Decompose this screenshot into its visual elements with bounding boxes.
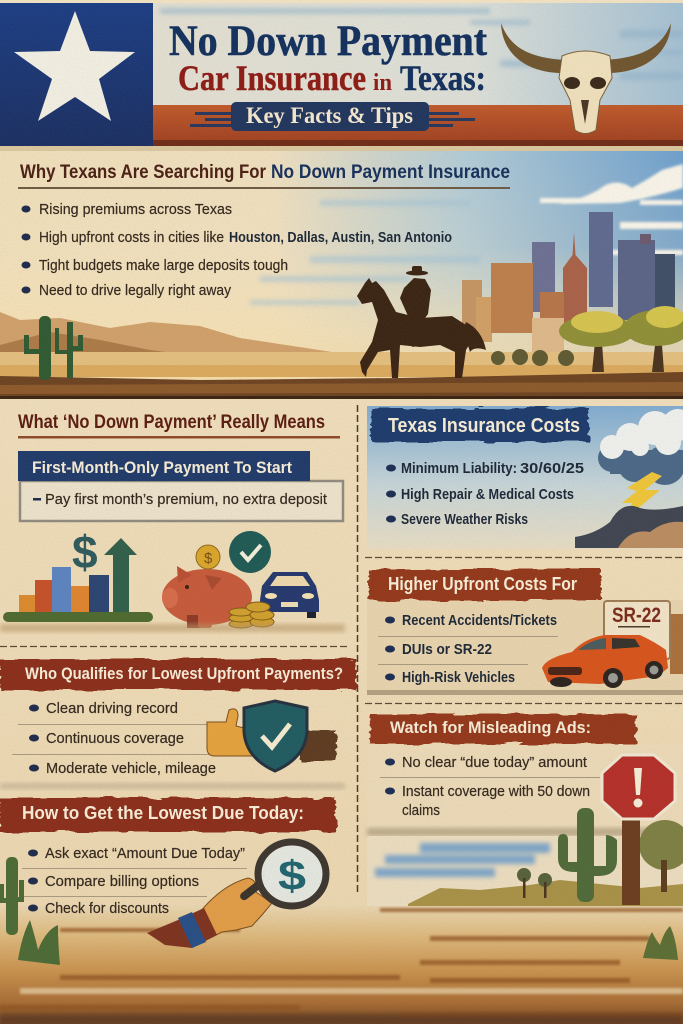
bullet list: Moderate vehicle, mileage bbox=[46, 760, 216, 777]
bullet list: Clean driving record bbox=[46, 700, 178, 717]
heading: Why Texans Are Searching For bbox=[20, 162, 267, 183]
bullet list bbox=[378, 612, 558, 686]
icon: storm cloud with lightning bbox=[575, 409, 683, 548]
panel: why Texans are searching bbox=[0, 146, 683, 399]
banner heading bbox=[368, 569, 601, 600]
icon: cowboy on horse bbox=[357, 266, 486, 378]
title: in bbox=[373, 70, 392, 96]
bullet list: Minimum Liability: bbox=[401, 460, 517, 477]
icon: hand with magnifying glass: $ bbox=[278, 852, 306, 899]
bullet list: Houston, Dallas, Austin, San Antonio bbox=[229, 229, 452, 246]
banner heading: Texas Insurance Costs bbox=[388, 415, 580, 437]
bullet list bbox=[22, 845, 247, 917]
bullet list: claims bbox=[402, 802, 440, 819]
trees bbox=[491, 306, 683, 372]
icon: small cactus and plants bbox=[0, 857, 60, 965]
banner heading bbox=[370, 714, 636, 744]
bullet list bbox=[0, 700, 345, 789]
icon: orange car bbox=[542, 635, 668, 688]
icon: longhorn skull bbox=[501, 23, 671, 134]
bullet list: Tight budgets make large deposits tough bbox=[39, 257, 288, 274]
title: Car Insurance bbox=[178, 58, 366, 98]
heading bbox=[18, 162, 510, 189]
heading: What ‘No Down Payment’ Really Means bbox=[18, 412, 325, 433]
bullet list: Continuous coverage bbox=[46, 730, 184, 747]
clouds bbox=[540, 164, 683, 255]
bullet list: Ask exact “Amount Due Today” bbox=[45, 845, 245, 862]
bullet list: No clear “due today” amount bbox=[402, 754, 588, 771]
callout: first month payment: First-Month-Only Payment To Start bbox=[32, 458, 292, 477]
bullet list: Need to drive legally right away bbox=[39, 282, 231, 299]
icon: tall cactus bbox=[558, 808, 617, 902]
banner heading: Watch for Misleading Ads: bbox=[390, 718, 591, 737]
bullet list: Instant coverage with 50 down bbox=[402, 783, 590, 800]
banner heading bbox=[0, 798, 336, 832]
skyline bbox=[462, 212, 675, 352]
bullet list: High-Risk Vehicles bbox=[402, 669, 515, 686]
ground bbox=[0, 365, 683, 399]
panel: lowest due today bbox=[0, 798, 336, 965]
subtitle badge bbox=[190, 102, 475, 131]
bullet list: Severe Weather Risks bbox=[401, 511, 528, 528]
title bbox=[169, 18, 488, 98]
icon: warning stop sign bbox=[602, 755, 675, 905]
heading: No Down Payment Insurance bbox=[271, 162, 510, 183]
bullet list: Check for discounts bbox=[45, 900, 169, 917]
icon: piggy bank: $ bbox=[204, 550, 213, 567]
icon: piggy bank bbox=[162, 545, 252, 628]
landscape bbox=[367, 836, 683, 906]
flag panel with star bbox=[0, 3, 153, 146]
banner heading bbox=[0, 659, 356, 690]
icon: tree bbox=[639, 820, 683, 892]
bullet list: Compare billing options bbox=[45, 873, 199, 890]
banner heading bbox=[371, 408, 589, 442]
ground: desert floor bbox=[0, 905, 683, 1024]
banner heading: How to Get the Lowest Due Today: bbox=[22, 803, 304, 823]
title: No Down Payment bbox=[169, 18, 488, 65]
bullet list bbox=[386, 460, 584, 528]
panel: higher upfront costs bbox=[367, 569, 683, 695]
icon: hand with magnifying glass bbox=[147, 842, 326, 948]
banner heading: Who Qualifies for Lowest Upfront Payments? bbox=[25, 664, 343, 683]
panel: Texas insurance costs bbox=[367, 406, 683, 549]
bullet list: DUIs or SR-22 bbox=[402, 641, 492, 658]
panel: who qualifies bbox=[0, 659, 356, 789]
subtitle badge: Key Facts & Tips bbox=[246, 103, 413, 128]
icon: gold coins bbox=[229, 602, 274, 628]
icon: check badge bbox=[229, 531, 271, 573]
icon: thumbs up and shield bbox=[207, 701, 336, 771]
bullet list bbox=[22, 201, 452, 299]
bullet list: 30/60/25 bbox=[520, 460, 584, 477]
icon: blue car bbox=[260, 572, 319, 618]
title: Texas: bbox=[400, 58, 486, 98]
bullet list: High Repair & Medical Costs bbox=[401, 486, 574, 503]
bar chart with arrow bbox=[3, 526, 153, 622]
icon: cactus bbox=[24, 316, 83, 380]
panel: what no down payment means bbox=[0, 412, 345, 632]
panel: misleading ads bbox=[367, 714, 683, 960]
bullet list: Recent Accidents/Tickets bbox=[402, 612, 557, 629]
bullet list bbox=[380, 754, 600, 819]
callout: first month payment bbox=[18, 451, 343, 521]
bar chart with arrow: $ bbox=[72, 526, 98, 578]
icon: SR-22 form: SR-22 bbox=[612, 604, 661, 627]
bullet list: Rising premiums across Texas bbox=[39, 201, 232, 218]
icon: desert plant bbox=[643, 926, 678, 960]
banner heading: Higher Upfront Costs For bbox=[388, 574, 577, 594]
header banner bbox=[0, 3, 683, 146]
callout: first month payment: Pay first month’s premium, no extra deposit bbox=[45, 491, 328, 508]
bullet list: High upfront costs in cities like bbox=[39, 229, 224, 246]
icon: SR-22 form bbox=[604, 601, 683, 674]
mountains bbox=[0, 312, 683, 376]
